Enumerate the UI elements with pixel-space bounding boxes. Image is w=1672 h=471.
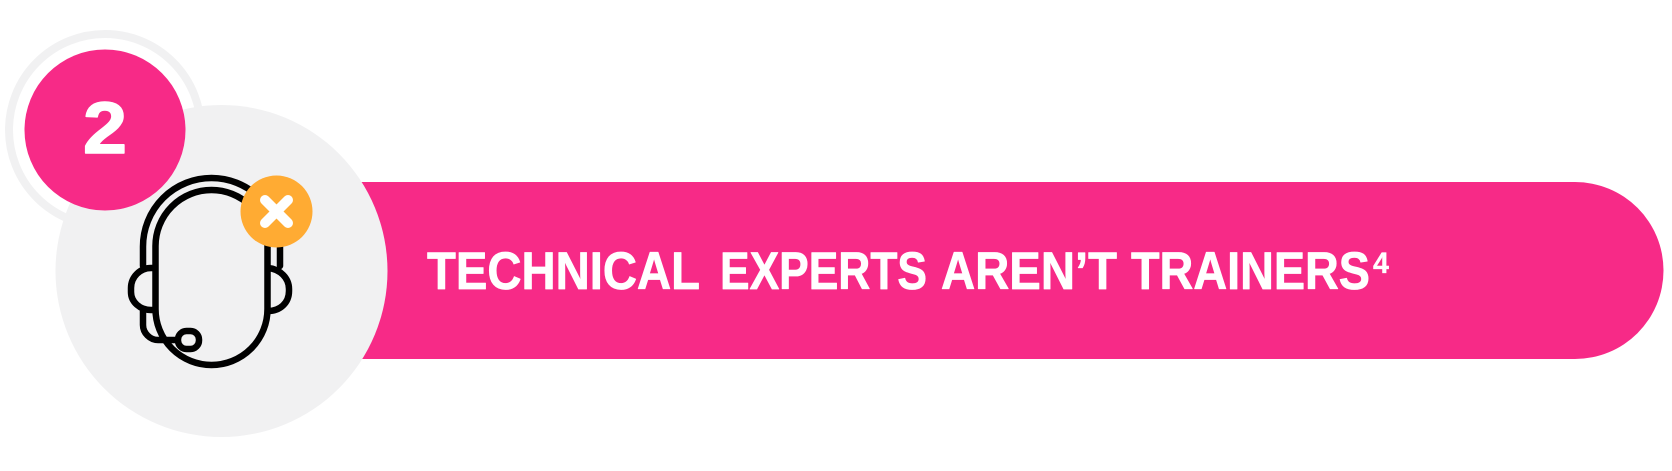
icon: headset <box>131 178 289 365</box>
icon: orange cross badge <box>240 176 312 248</box>
heading: TECHNICAL <box>427 242 700 301</box>
heading: TRAINERS <box>1131 242 1370 301</box>
number badge outer ring <box>9 34 201 226</box>
heading: AREN’T <box>941 242 1117 301</box>
number badge <box>24 50 186 210</box>
heading: 4 <box>1373 247 1389 280</box>
title banner <box>221 182 1664 359</box>
heading <box>427 242 1389 301</box>
icon backdrop circle <box>56 105 388 437</box>
heading: EXPERTS <box>720 242 927 301</box>
number badge: 2 <box>83 88 127 169</box>
